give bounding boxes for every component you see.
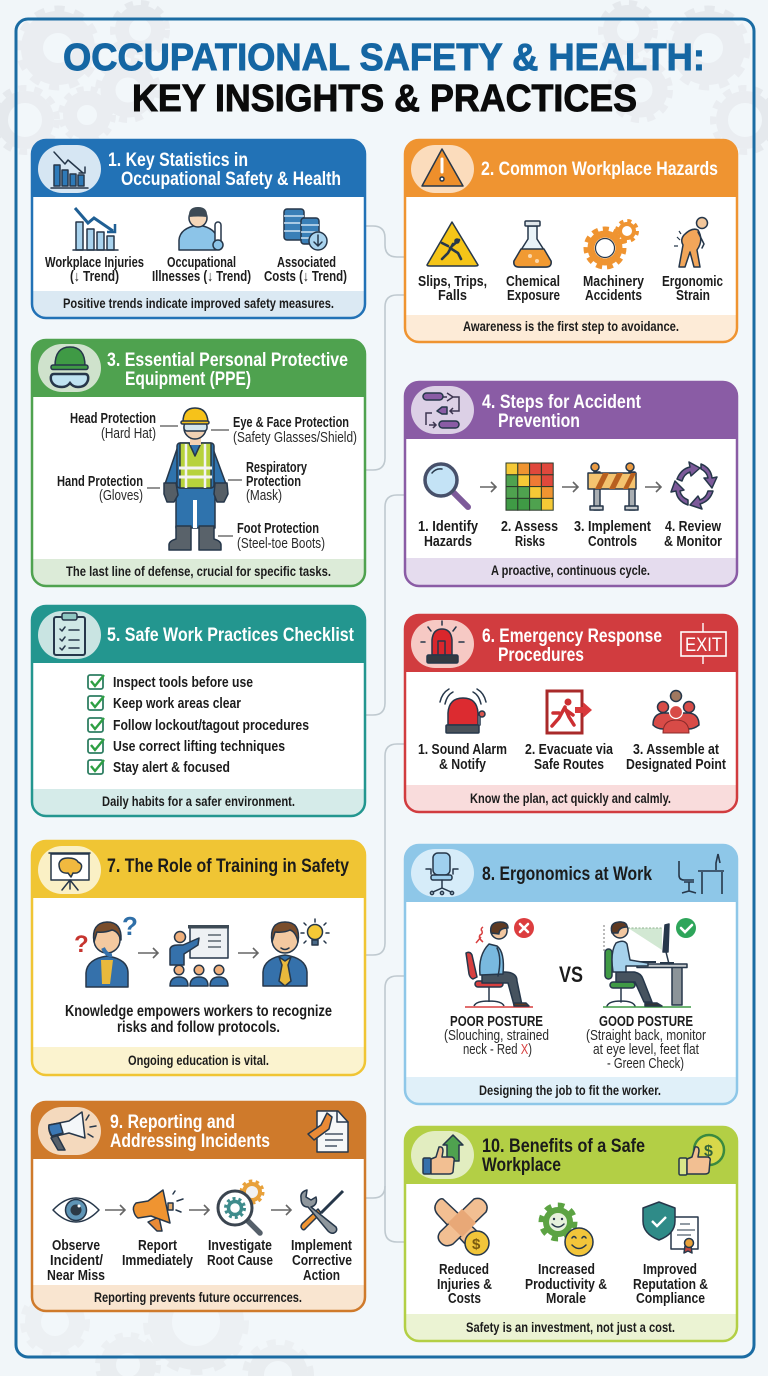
hazard labels: Falls <box>438 288 467 304</box>
hazard labels: Accidents <box>585 288 642 304</box>
heading: 6. Emergency Response <box>482 626 662 647</box>
panel 6: emergency response procedures <box>405 615 737 812</box>
arrow <box>271 1205 291 1215</box>
icon: chemical flask <box>514 221 551 267</box>
step labels: 4. Review <box>665 519 722 535</box>
icon: poor posture figure <box>465 918 534 1007</box>
title <box>63 37 705 120</box>
title: KEY INSIGHTS & PRACTICES <box>132 78 637 120</box>
heading: 2. Common Workplace Hazards <box>481 159 718 180</box>
benefit labels: Reputation & <box>633 1277 708 1293</box>
step labels: 1. Sound Alarm <box>418 742 507 758</box>
step labels: 2. Assess <box>501 519 558 535</box>
step labels: 3. Assemble at <box>633 742 719 758</box>
step labels: & Monitor <box>664 534 722 550</box>
panel 7: the role of training <box>32 841 365 1075</box>
hazard labels: Machinery <box>583 274 644 290</box>
hazard labels: Slips, Trips, <box>418 274 487 290</box>
icon: desk and chair <box>679 854 724 894</box>
hazard labels: Chemical <box>506 274 560 290</box>
footer note: A proactive, continuous cycle. <box>491 563 650 578</box>
worker figure with PPE <box>164 408 228 550</box>
step labels: Risks <box>515 534 545 550</box>
vs label: VS <box>559 962 583 987</box>
icon: incident document <box>308 1111 348 1152</box>
step labels: 1. Identify <box>418 519 478 535</box>
icon: bandage and coin: $ <box>472 1236 481 1253</box>
PPE callouts: (Steel-toe Boots) <box>237 536 325 552</box>
step labels: Root Cause <box>207 1253 273 1269</box>
heading: Prevention <box>498 411 580 432</box>
step labels <box>418 519 722 550</box>
heading: 3. Essential Personal Protective <box>107 350 348 371</box>
panel 9: reporting and addressing incidents <box>32 1102 365 1311</box>
icon: good posture figure <box>603 918 696 1007</box>
heading: 8. Ergonomics at Work <box>482 864 652 885</box>
stat labels: (↓ Trend) <box>70 269 119 285</box>
hazard labels: Ergonomic <box>662 274 723 290</box>
step labels: Corrective <box>292 1253 352 1269</box>
panel 4: steps for accident prevention <box>405 382 737 586</box>
checklist: Inspect tools before use <box>113 675 253 691</box>
icon: gear and smile <box>541 1205 593 1256</box>
step labels <box>47 1238 352 1284</box>
icon: office chair <box>411 849 474 897</box>
step labels: & Notify <box>439 757 486 773</box>
icon: confused worker: ? <box>74 931 89 958</box>
icon: exit sign <box>681 623 726 664</box>
heading: 5. Safe Work Practices Checklist <box>107 625 355 646</box>
benefit labels: Costs <box>448 1291 481 1307</box>
PPE callouts: (Mask) <box>246 488 282 504</box>
step labels: Hazards <box>424 534 472 550</box>
panel 5: safe work practices checklist <box>32 606 365 816</box>
PPE callouts: (Hard Hat) <box>101 426 156 442</box>
stat labels: Associated <box>277 255 336 271</box>
heading <box>482 1136 645 1176</box>
icon: bandage and coin <box>435 1198 489 1255</box>
icon: thumbs up with dollar: $ <box>704 1143 713 1160</box>
heading: Equipment (PPE) <box>125 369 251 390</box>
icon: trainer with audience <box>170 925 229 986</box>
panel 3: personal protective equipment <box>32 340 365 586</box>
arrow <box>645 482 661 492</box>
icon: machinery gears <box>586 221 637 267</box>
arrow <box>480 482 496 492</box>
heading: 9. Reporting and <box>110 1112 235 1133</box>
heading <box>108 150 341 190</box>
heading <box>482 392 642 432</box>
heading <box>482 626 662 666</box>
connector lines <box>365 226 405 1242</box>
PPE callouts: (Gloves) <box>99 488 143 504</box>
heading: Occupational Safety & Health <box>121 169 341 190</box>
benefit labels: Increased <box>538 1262 595 1278</box>
heading: 10. Benefits of a Safe <box>482 1136 645 1157</box>
icon: risk matrix <box>506 463 553 510</box>
icon: presentation board with brain <box>38 846 101 894</box>
icon: confused worker: ? <box>122 911 138 941</box>
footer note: Ongoing education is vital. <box>128 1053 269 1068</box>
step labels: Report <box>138 1238 177 1254</box>
benefit labels <box>437 1262 708 1307</box>
icon: ergonomic strain worker <box>674 218 708 267</box>
step labels <box>418 742 726 773</box>
step labels: Observe <box>52 1238 100 1254</box>
panel 10: benefits of a safe workplace <box>405 1127 737 1341</box>
icon: review cycle <box>671 462 717 509</box>
step labels: Near Miss <box>47 1268 105 1284</box>
panel 2: common workplace hazards <box>405 140 737 342</box>
posture labels: GOOD POSTURE <box>599 1014 693 1030</box>
body text <box>65 1003 332 1036</box>
step labels: Controls <box>588 534 637 550</box>
body text: risks and follow protocols. <box>117 1019 280 1036</box>
footer note: Awareness is the first step to avoidance. <box>463 319 679 334</box>
heading: Workplace <box>482 1155 561 1176</box>
icon: wrench and screwdriver <box>301 1190 343 1233</box>
footer note: Positive trends indicate improved safety measures. <box>63 296 334 311</box>
icon: alarm <box>440 689 486 733</box>
arrow <box>105 1205 125 1215</box>
footer note: Reporting prevents future occurrences. <box>94 1290 302 1305</box>
icon: warning triangle <box>411 145 474 193</box>
heading: Procedures <box>498 645 584 666</box>
icon: occupational illness worker <box>179 207 223 250</box>
heading <box>110 1112 270 1152</box>
body text: Knowledge empowers workers to recognize <box>65 1003 332 1020</box>
icon: megaphone <box>38 1107 101 1155</box>
icon: workplace injuries chart <box>73 208 118 250</box>
icon: associated costs coins <box>284 209 327 250</box>
arrow <box>189 1205 209 1215</box>
step labels: Incident/ <box>50 1253 103 1269</box>
heading: Addressing Incidents <box>110 1131 270 1152</box>
step labels: Action <box>303 1268 340 1284</box>
benefit labels: Productivity & <box>525 1277 607 1293</box>
icon: process flow <box>411 386 474 434</box>
PPE callouts: Foot Protection <box>237 521 319 537</box>
icon: assembly group <box>653 690 699 733</box>
icon: emergency beacon <box>411 620 474 668</box>
benefit labels: Compliance <box>636 1291 705 1307</box>
step labels: Immediately <box>122 1253 193 1269</box>
icon: orange megaphone <box>133 1190 183 1231</box>
icon: thumbs up with arrow <box>411 1131 474 1179</box>
icon: evacuation door <box>547 691 592 733</box>
icon: thumbs up with dollar <box>679 1135 724 1175</box>
stat labels: Illnesses (↓ Trend) <box>152 269 251 285</box>
title: OCCUPATIONAL SAFETY & HEALTH: <box>63 37 705 79</box>
icon: hard hat and goggles <box>38 344 101 392</box>
icon: investigate magnifier <box>218 1181 263 1233</box>
step labels: Implement <box>291 1238 352 1254</box>
benefit labels: Reduced <box>439 1262 489 1278</box>
posture labels: at eye level, feet flat <box>593 1042 699 1058</box>
icon: confused worker <box>74 911 138 987</box>
hazard labels <box>418 274 723 304</box>
footer note: Daily habits for a safer environment. <box>102 794 295 809</box>
checklist: Use correct lifting techniques <box>113 739 285 755</box>
footer note: Designing the job to fit the worker. <box>479 1083 661 1098</box>
icon: declining chart in header <box>38 145 101 193</box>
icon: eye <box>53 1198 99 1222</box>
PPE callouts: Head Protection <box>70 411 156 427</box>
step labels: Safe Routes <box>534 757 604 773</box>
panel 8: ergonomics at work <box>405 845 737 1104</box>
hazard labels: Strain <box>676 288 710 304</box>
benefit labels: Injuries & <box>437 1277 492 1293</box>
step labels: Designated Point <box>626 757 726 773</box>
footer note: The last line of defense, crucial for specific tasks. <box>66 564 331 579</box>
footer note: Safety is an investment, not just a cost. <box>466 1320 675 1335</box>
stat labels: Occupational <box>167 255 236 271</box>
stat labels: Costs (↓ Trend) <box>264 269 347 285</box>
benefit labels: Morale <box>546 1291 586 1307</box>
benefit labels: Improved <box>643 1262 697 1278</box>
footer note: Know the plan, act quickly and calmly. <box>470 791 671 806</box>
arrow <box>238 948 258 958</box>
posture labels: - Green Check) <box>607 1056 684 1072</box>
icon: shield and certificate <box>643 1202 698 1253</box>
panel 1: key statistics <box>32 140 365 318</box>
PPE callouts: Hand Protection <box>57 474 143 490</box>
icon: barricade <box>588 463 638 510</box>
posture labels: (Straight back, monitor <box>586 1028 706 1044</box>
hazard labels: Exposure <box>507 288 560 304</box>
icon: slips trips falls sign <box>427 222 478 266</box>
PPE callouts: Protection <box>246 474 301 490</box>
icon: magnifying glass <box>425 464 468 507</box>
PPE callouts: Eye & Face Protection <box>233 415 349 431</box>
stat labels: Workplace Injuries <box>45 255 144 271</box>
heading: 1. Key Statistics in <box>108 150 248 171</box>
step labels: 2. Evacuate via <box>525 742 614 758</box>
icon: clipboard <box>38 611 101 659</box>
checklist: Follow lockout/tagout procedures <box>113 718 309 734</box>
PPE callouts: Respiratory <box>246 460 307 476</box>
step labels: Investigate <box>208 1238 272 1254</box>
PPE callouts: (Safety Glasses/Shield) <box>233 430 357 446</box>
arrow <box>562 482 578 492</box>
heading <box>107 350 348 390</box>
icon: exit sign: EXIT <box>685 635 722 656</box>
checklist: Stay alert & focused <box>113 760 230 776</box>
stat labels <box>45 255 347 285</box>
posture labels: POOR POSTURE <box>450 1014 543 1030</box>
posture labels: (Slouching, strained <box>444 1028 549 1044</box>
arrow <box>138 948 158 958</box>
checklist: Keep work areas clear <box>113 696 241 712</box>
posture labels: neck - Red X) <box>463 1042 532 1058</box>
icon: enlightened worker <box>263 919 329 986</box>
posture labels <box>444 1014 706 1072</box>
checklist <box>88 675 309 776</box>
PPE callouts <box>57 411 357 552</box>
heading: 7. The Role of Training in Safety <box>107 856 349 877</box>
step labels: 3. Implement <box>574 519 651 535</box>
heading: 4. Steps for Accident <box>482 392 642 413</box>
